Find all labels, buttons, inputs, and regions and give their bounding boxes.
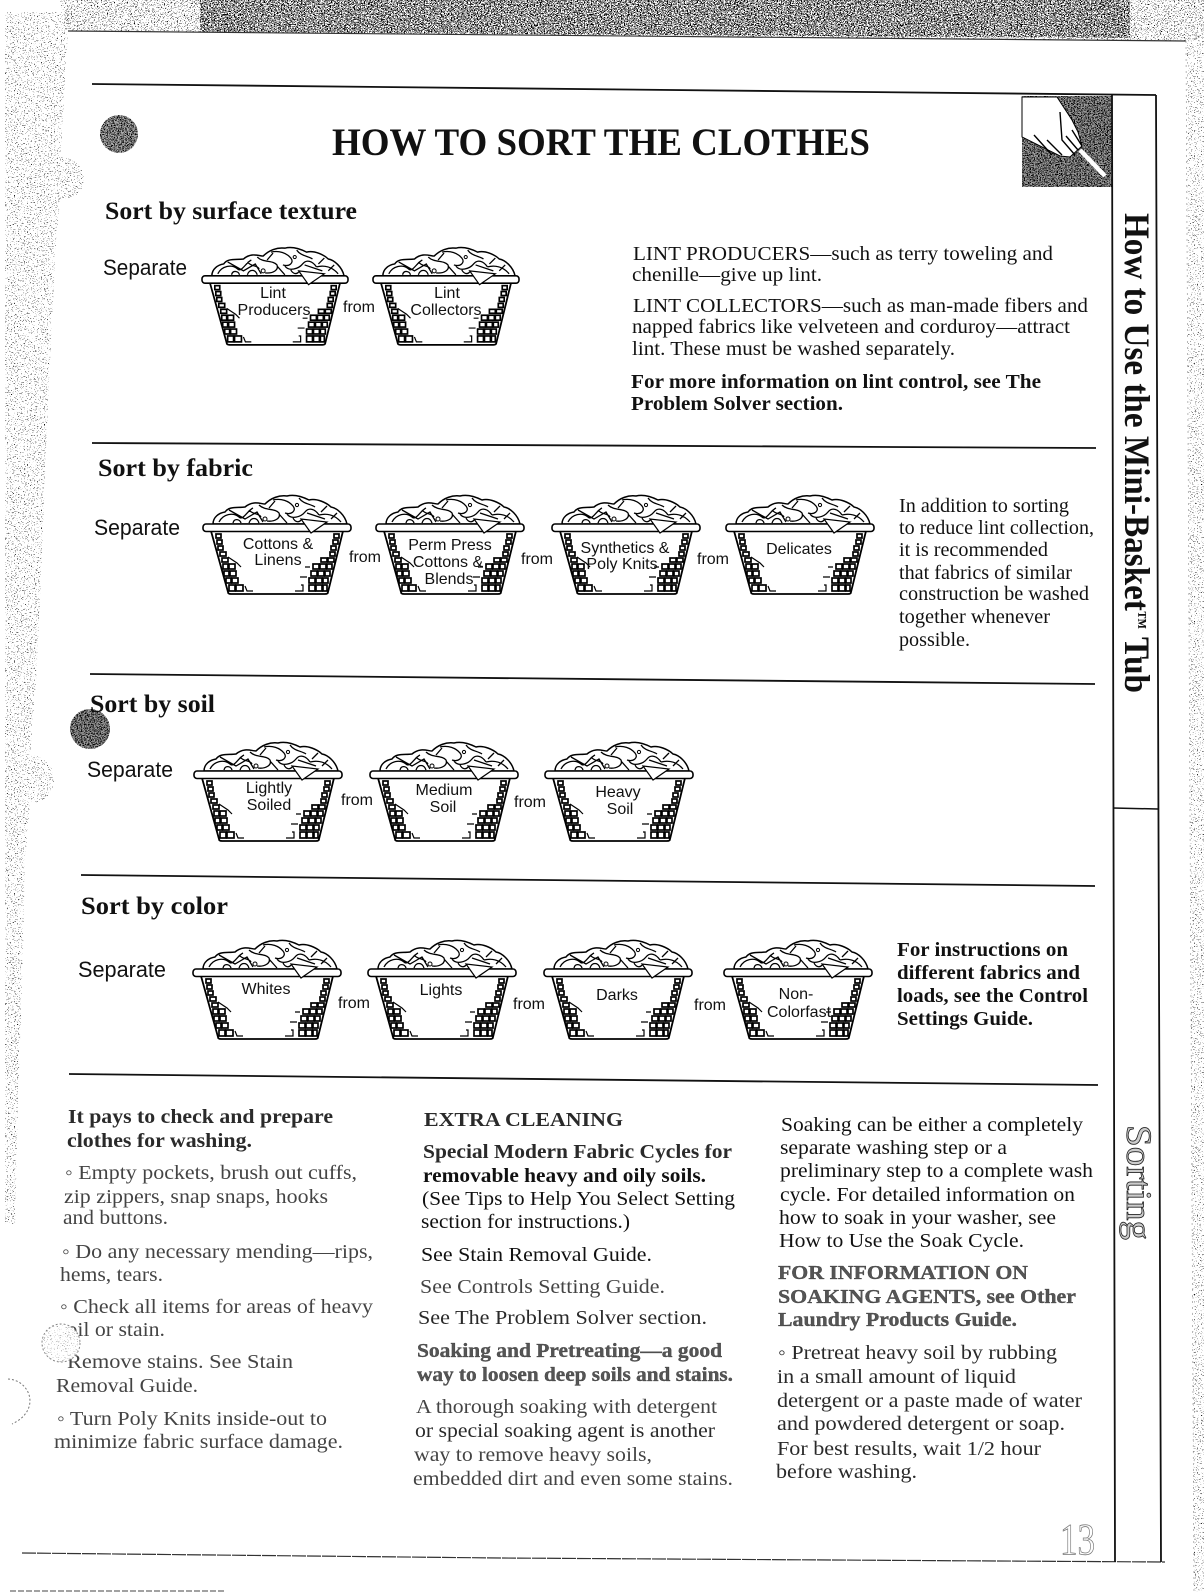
basket: lint collectors	[373, 248, 519, 345]
column: soaking: in a small amount of liquid	[777, 1366, 1016, 1388]
basket: heavy soil: Heavy	[595, 784, 641, 801]
basket: cottons and linens: Cottons &	[243, 536, 313, 553]
column: extra cleaning: way to remove heavy soils,	[414, 1444, 652, 1466]
basket: lights: Lights	[420, 982, 462, 999]
text block: fabric note: it is recommended	[899, 539, 1048, 561]
from label: from	[341, 792, 373, 809]
column: extra cleaning: See The Problem Solver section.	[418, 1307, 707, 1329]
text block: control settings note: For instructions on	[897, 939, 1068, 961]
tab label: section name: How to Use the Mini-Basket	[1117, 213, 1157, 645]
tab label: Sorting: Sorting	[1119, 1125, 1159, 1240]
basket: non-colorfast: Non-	[779, 986, 813, 1003]
column: preparing clothes: hems, tears.	[60, 1264, 163, 1286]
punch hole ghosts	[8, 1322, 82, 1424]
section: sort by fabric	[94, 455, 874, 594]
column: extra cleaning: removable heavy and oily soils.	[423, 1165, 706, 1187]
heading: Sort by surface texture	[105, 198, 357, 225]
text block: fabric note: that fabrics of similar	[899, 562, 1072, 584]
basket: perm press: Blends	[425, 571, 473, 588]
basket: lights	[368, 940, 516, 1039]
column: soaking: before washing.	[776, 1461, 917, 1483]
basket: non-colorfast: Colorfast	[767, 1004, 832, 1021]
basket: lightly soiled	[194, 742, 342, 841]
column: soaking: Laundry Products Guide.	[778, 1309, 1017, 1331]
column: extra cleaning: (See Tips to Help You Select Setting	[422, 1188, 735, 1210]
basket: heavy soil: Soil	[607, 801, 633, 818]
column: soaking: detergent or a paste made of water	[777, 1390, 1082, 1412]
column: preparing clothes: clothes for washing.	[67, 1130, 252, 1152]
section: sort by color	[78, 893, 872, 1039]
punch hole circle top	[100, 115, 138, 153]
from label: from	[349, 549, 381, 566]
separate label: Separate	[78, 957, 166, 982]
title: HOW TO SORT THE CLOTHES	[332, 121, 870, 164]
basket: perm press: Perm Press	[408, 537, 492, 554]
text block: lint explanation: Problem Solver section.	[631, 393, 843, 415]
basket: lightly soiled: Lightly	[246, 780, 292, 797]
column: soaking: and powdered detergent or soap.	[777, 1413, 1065, 1435]
from label: from	[694, 997, 726, 1014]
tab label: section name: ™	[1128, 611, 1150, 629]
basket: non-colorfast	[724, 940, 872, 1039]
column: soaking: ◦ Pretreat heavy soil by rubbing	[778, 1342, 1057, 1364]
column: extra cleaning: way to loosen deep soils and stains.	[417, 1364, 733, 1386]
page number: 13	[1060, 1515, 1095, 1564]
column: preparing clothes: Remove stains. See Stain	[67, 1351, 293, 1373]
basket: synthetics: Poly Knits	[586, 556, 658, 573]
basket: delicates	[726, 495, 874, 594]
heading: Sort by color	[81, 893, 228, 920]
column: extra cleaning	[413, 1109, 735, 1490]
column: extra cleaning: or special soaking agent is another	[415, 1420, 715, 1442]
basket: heavy soil	[545, 742, 693, 841]
column: soaking: preliminary step to a complete wash	[780, 1160, 1093, 1182]
column: soaking: separate washing step or a	[780, 1137, 1007, 1159]
section: sort by soil	[87, 691, 693, 841]
column: extra cleaning: embedded dirt and even some stains.	[413, 1468, 733, 1490]
basket: lint collectors: Collectors	[410, 302, 482, 319]
text block: control settings note: Settings Guide.	[897, 1008, 1033, 1030]
text block: fabric note	[899, 495, 1094, 651]
column: soaking	[776, 1114, 1093, 1483]
basket: cottons and linens: Linens	[254, 552, 302, 569]
punch hole circle middle	[70, 709, 110, 749]
column: preparing clothes: It pays to check and prepare	[68, 1106, 333, 1128]
column: soaking: FOR INFORMATION ON	[778, 1262, 1029, 1284]
text block: lint explanation: LINT COLLECTORS—such as man-made fibers and	[633, 295, 1088, 317]
column: preparing clothes: zip zippers, snap snaps, hooks	[64, 1186, 328, 1208]
text block: fabric note: together whenever	[899, 606, 1050, 628]
separate label: Separate	[94, 515, 180, 540]
basket: whites: Whites	[242, 981, 290, 998]
basket: perm press: Cottons &	[413, 554, 483, 571]
basket: synthetics: Synthetics &	[581, 540, 670, 557]
from label: from	[697, 551, 729, 568]
heading: Sort by fabric	[98, 455, 253, 482]
column: preparing clothes: Removal Guide.	[56, 1375, 198, 1397]
basket: darks: Darks	[596, 987, 638, 1004]
section: sort by surface texture	[103, 198, 519, 345]
text block: lint explanation: chenille—give up lint.	[632, 264, 822, 286]
column: extra cleaning: Soaking and Pretreating—a good	[417, 1340, 722, 1362]
column: soaking: For best results, wait 1/2 hour	[777, 1438, 1041, 1460]
column: extra cleaning: Special Modern Fabric Cycles for	[423, 1141, 732, 1163]
basket: lint producers: Producers	[238, 302, 310, 319]
basket: medium soil: Medium	[416, 782, 472, 799]
column: preparing clothes: minimize fabric surface damage.	[54, 1431, 343, 1453]
basket: lint producers: Lint	[260, 285, 286, 302]
basket: delicates: Delicates	[766, 541, 832, 558]
text block: fabric note: possible.	[899, 629, 970, 651]
text block: fabric note: construction be washed	[899, 583, 1089, 605]
text block: lint explanation	[631, 243, 1088, 415]
column: soaking: cycle. For detailed information on	[780, 1184, 1075, 1206]
text block: control settings note	[897, 939, 1088, 1030]
side tab panel	[1112, 95, 1161, 1562]
column: preparing clothes: ◦ Do any necessary mending—rips,	[62, 1241, 373, 1263]
from label: from	[513, 996, 545, 1013]
text block: fabric note: In addition to sorting	[899, 495, 1069, 517]
column: soaking: SOAKING AGENTS, see Other	[778, 1286, 1076, 1308]
text block: lint explanation: LINT PRODUCERS—such as terry toweling and	[633, 243, 1053, 265]
basket: lint producers	[202, 248, 348, 345]
column: preparing clothes: ◦ Empty pockets, brush out cuffs,	[65, 1162, 357, 1184]
column: soaking: How to Use the Soak Cycle.	[779, 1230, 1024, 1252]
basket: cottons and linens	[203, 495, 351, 594]
from label: from	[521, 551, 553, 568]
icon: hand holding a stick	[1022, 96, 1112, 187]
from label: from	[343, 299, 375, 316]
column: soaking: how to soak in your washer, see	[779, 1207, 1056, 1229]
column: extra cleaning: section for instructions.)	[421, 1211, 630, 1233]
column: preparing clothes: and buttons.	[63, 1207, 168, 1229]
basket: synthetics	[552, 495, 700, 594]
basket: whites	[193, 940, 341, 1039]
column: extra cleaning: A thorough soaking with detergent	[416, 1396, 717, 1418]
basket: darks	[544, 940, 692, 1039]
text block: control settings note: different fabrics and	[897, 962, 1080, 984]
text block: lint explanation: lint. These must be washed separately.	[632, 338, 955, 360]
text block: fabric note: to reduce lint collection,	[899, 517, 1094, 539]
from label: from	[338, 995, 370, 1012]
basket: medium soil: Soil	[430, 799, 456, 816]
separate label: Separate	[87, 757, 173, 782]
column: preparing clothes: ◦ Turn Poly Knits inside-out to	[57, 1408, 327, 1430]
text block: lint explanation: For more information on lint control, see The	[631, 371, 1041, 393]
column: extra cleaning: EXTRA CLEANING	[424, 1109, 623, 1131]
text block: lint explanation: napped fabrics like velveteen and corduroy—attract	[632, 316, 1070, 338]
separate label: Separate	[103, 255, 187, 280]
basket: lint collectors: Lint	[434, 285, 460, 302]
column: soaking: Soaking can be either a completely	[781, 1114, 1083, 1136]
column: extra cleaning: See Controls Setting Guide.	[420, 1276, 665, 1298]
text block: control settings note: loads, see the Control	[897, 985, 1088, 1007]
tab label: section name: Tub	[1117, 629, 1157, 693]
basket: perm press	[376, 495, 524, 594]
column: preparing clothes: soil or stain.	[58, 1319, 165, 1341]
column: preparing clothes	[54, 1106, 373, 1453]
column: preparing clothes: ◦ Check all items for areas of heavy	[60, 1296, 373, 1318]
basket: lightly soiled: Soiled	[247, 797, 291, 814]
basket: medium soil	[370, 742, 518, 841]
from label: from	[514, 794, 546, 811]
heading: Sort by soil	[90, 691, 215, 718]
column: extra cleaning: See Stain Removal Guide.	[421, 1244, 652, 1266]
